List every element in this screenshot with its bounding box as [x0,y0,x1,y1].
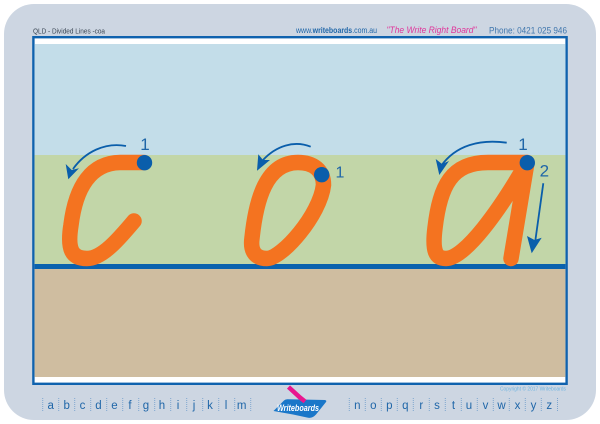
stroke arrow [263,144,311,160]
letter a [434,135,549,258]
alphabet a to m: h [159,400,165,412]
alphabet n to z: v [483,400,489,412]
number 2: 2 [540,162,549,180]
stroke arrow 2 [535,183,543,243]
alphabet a to m: l [225,400,227,412]
logo badge [274,399,326,418]
number 1: 1 [140,135,150,154]
start dot [520,155,535,170]
alphabet n to z: x [515,400,521,412]
grass band [35,155,565,264]
alphabet a to m: i [177,400,179,412]
alphabet n to z: o [370,400,377,412]
letter o [252,144,345,258]
logo wordmark: Writeboards [277,403,319,413]
alphabet n to z: q [402,400,409,412]
header: worksheet title: QLD - Divided Lines -coa [33,26,106,36]
start dot [137,155,152,170]
stroke arrow 1 [441,142,507,166]
alphabet a to m: g [143,400,149,412]
alphabet n to z: w [496,400,506,412]
alphabet a to m: j [192,400,195,412]
alphabet n to z: t [452,400,456,412]
alphabet a to m: c [80,400,86,412]
alphabet a to m [43,398,251,412]
ground band [35,269,565,377]
alphabet n to z: n [354,400,361,412]
header: website: www.writeboards.com.au [295,26,377,35]
alphabet a to m: b [63,400,70,412]
alphabet n to z: r [419,400,423,412]
header: phone: Phone: 0421 025 946 [489,26,567,36]
letter c [66,135,152,258]
alphabet n to z: p [386,400,393,412]
writing frame [33,37,567,384]
logo: Writeboards [274,387,326,418]
alphabet n to z: y [531,400,537,412]
alphabet n to z: s [434,400,440,412]
start dot [314,167,329,182]
alphabet n to z: z [546,400,552,412]
alphabet n to z: u [466,400,472,412]
copyright: Copyright © 2017 Writeboards [500,386,566,392]
alphabet a to m: f [128,400,132,412]
alphabet a to m: e [111,400,118,412]
header: slogan: "The Write Right Board" [386,25,477,35]
number 1: 1 [518,135,528,154]
number 1: 1 [336,164,345,182]
alphabet a to m: a [47,400,54,412]
logo pen [288,387,305,402]
baseline [35,264,565,269]
alphabet a to m: k [207,400,213,412]
alphabet n to z [349,398,558,412]
sky band [35,44,565,155]
alphabet a to m: d [95,400,102,412]
alphabet a to m: m [237,400,246,412]
stroke arrow [73,145,126,169]
